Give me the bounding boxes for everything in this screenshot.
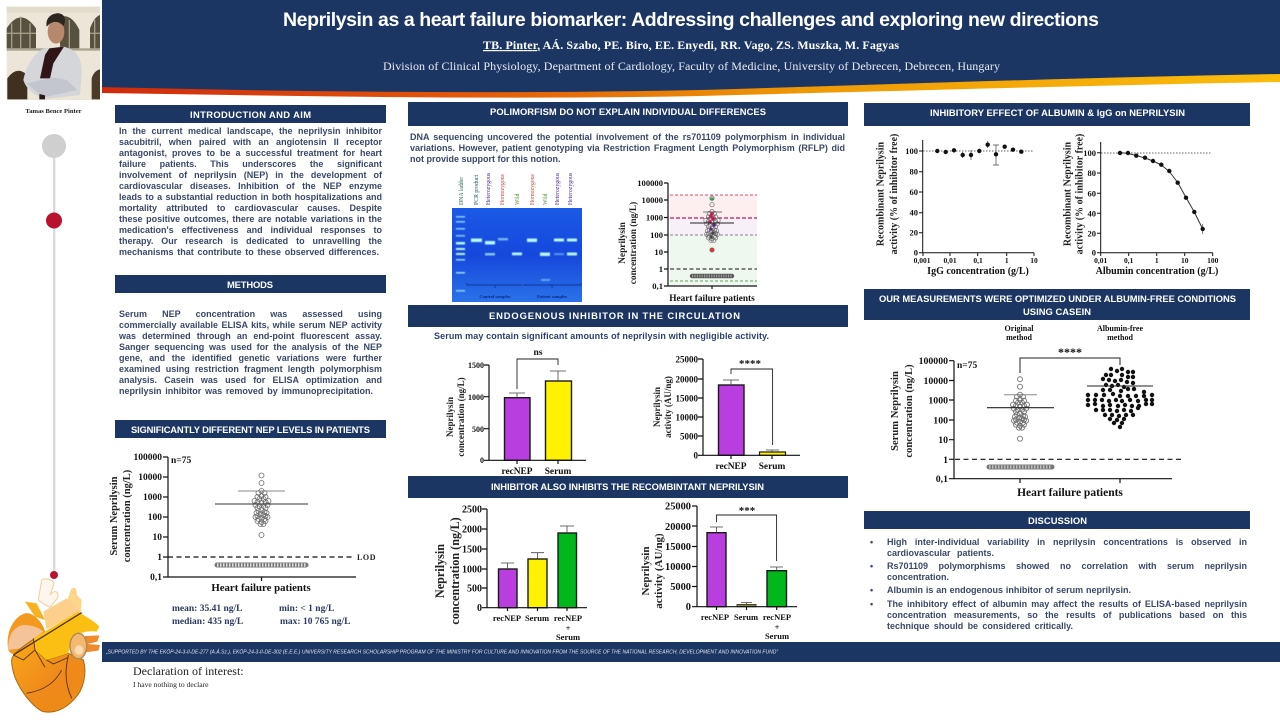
- bar chart: activity recNEP vs serum: 15000: [676, 394, 698, 404]
- declaration of interest: I have nothing to declare: [133, 680, 209, 689]
- chart: serum neprilysin in patients: 100000: [134, 453, 162, 463]
- chart: original versus albumin-free method: concentration (ng/L): [904, 364, 915, 458]
- section header: introduction: [115, 105, 386, 123]
- bar chart: concentration with combination: 0: [477, 603, 482, 614]
- bar chart: concentration with combination: 2000: [462, 524, 482, 536]
- chart: genotype scatter: 10: [654, 247, 663, 257]
- chart: original versus albumin-free method: 1: [943, 455, 948, 466]
- line chart: IgG inhibition: 1: [1005, 256, 1009, 265]
- chart: original versus albumin-free method: 10: [938, 435, 948, 446]
- line chart: albumin inhibition: 100: [1083, 148, 1096, 158]
- chart: original versus albumin-free method: 10000: [924, 376, 948, 387]
- line chart: albumin inhibition: [1062, 134, 1219, 277]
- bullet one: [870, 537, 1247, 558]
- section header: polymorphism: POLIMORFISM DO NOT EXPLAIN INDIVIDUAL DIFFERENCES: [490, 106, 766, 117]
- section header: recombinant inhibition: INHIBITOR ALSO INHIBITS THE RECOMBINTANT NEPRILYSIN: [491, 481, 764, 492]
- chart: serum neprilysin in patients: 0,1: [150, 573, 162, 583]
- text: introduction: cardiovascular diseases. Inhibition of the NEP enzyme: [119, 181, 382, 191]
- presenter photo: [7, 7, 100, 100]
- line chart: IgG inhibition: activity (% of inhibitor free): [889, 134, 900, 254]
- text: introduction: leads to a substantial reduction in both hospitalizations and: [119, 192, 382, 202]
- line chart: albumin inhibition: 40: [1088, 208, 1096, 218]
- section header: albumin and IgG: INHIBITORY EFFECT OF ALBUMIN & IgG on NEPRILYSIN: [930, 107, 1185, 118]
- chart: original versus albumin-free method: 100000: [919, 356, 948, 367]
- bar chart: concentration recNEP vs serum: concentration (ng/L): [456, 377, 466, 457]
- bar chart: concentration recNEP vs serum: Neprilysin: [445, 397, 455, 437]
- bar chart: activity recNEP vs serum: Serum: [759, 462, 785, 472]
- chart: original versus albumin-free method: Serum Neprilysin: [890, 371, 901, 451]
- icon: anatomical heart: [8, 579, 100, 712]
- RFLP gel image: Heterozygous: [486, 172, 492, 205]
- section header: patient levels: [115, 420, 386, 438]
- bar chart: concentration with combination: 500: [467, 584, 482, 594]
- chart: genotype scatter: 1000: [646, 212, 663, 222]
- bar chart: concentration with combination: recNEP: [554, 613, 582, 623]
- section header: endogenous inhibitor: [408, 305, 848, 327]
- bar chart: concentration with combination: 1000: [462, 564, 482, 576]
- section header: casein optimization: USING CASEIN: [1023, 306, 1091, 317]
- chart: serum neprilysin in patients: 10: [152, 533, 162, 543]
- line chart: IgG inhibition: 40: [910, 208, 918, 218]
- line chart: IgG inhibition: IgG concentration (g/L): [927, 266, 1029, 277]
- text: introduction: failure patients. This underscores the significant: [119, 159, 382, 169]
- bar chart: concentration with combination: Serum: [556, 632, 580, 642]
- bar chart: activity with combination: ***: [739, 505, 756, 517]
- funding bar: [102, 642, 1280, 662]
- RFLP gel image: Homozygous: [500, 173, 506, 205]
- bullet four: [870, 599, 1247, 631]
- bar chart: activity with combination: Serum: [765, 631, 789, 641]
- bar chart: activity with combination: Neprilysin: [640, 547, 652, 595]
- text: introduction: antagonist, proves to be a successful treatment for heart: [119, 148, 382, 158]
- text: polymorphism finding: variations. However, patient genotyping via Restriction Fragment Length Polymorphism (RFLP) did: [410, 143, 845, 153]
- section header: methods: [115, 275, 386, 293]
- text: introduction: mechanisms that contribute to these observed differences.: [119, 247, 379, 257]
- chart: serum neprilysin in patients: Serum Neprilysin: [109, 476, 120, 556]
- text: methods: analysis. Casein was used for ELISA optimization and: [119, 375, 382, 385]
- timeline: [42, 134, 66, 579]
- text: introduction: these positive outcomes, there are notable variations in the: [119, 214, 382, 224]
- RFLP gel image: Heterozygous: [555, 172, 561, 205]
- RFLP gel image: Control samples: [479, 294, 511, 299]
- bar chart: concentration with combination: Neprilysin: [433, 544, 447, 598]
- bar chart: concentration with combination: +: [566, 623, 571, 633]
- chart: original versus albumin-free method: 0,1: [936, 474, 948, 485]
- chart: genotype scatter: 1: [659, 264, 663, 274]
- line chart: albumin inhibition: 0,01: [1094, 256, 1108, 265]
- RFLP gel image: DNA ladder: [459, 177, 465, 205]
- line chart: albumin inhibition: 60: [1088, 188, 1096, 198]
- section header: endogenous inhibitor: ENDOGENOUS INHIBITOR IN THE CIRCULATION: [489, 310, 740, 321]
- funding bar: „SUPPORTED BY THE EKÖP-24-3-II-DE-277 (A.Á.Sz.), EKÖP-24-3-II-DE-302 (E.E.E.) UNIVERSITY RESEARCH SCHOLARSHIP PROGRAM OF THE MINISTRY FOR CULTURE AND INNOVATION FROM THE SOURCE OF THE NATIONAL RESEARCH, DEVELOPMENT AND INNOVATION FUND”: [105, 648, 778, 656]
- bullet four: concentration measurements, so the results of publications based on this: [887, 610, 1247, 620]
- chart: genotype scatter: concentration (ng/L): [628, 202, 639, 284]
- bar chart: activity with combination: recNEP: [763, 612, 791, 622]
- line chart: IgG inhibition: 20: [910, 228, 918, 238]
- bar chart: concentration recNEP vs serum: 1000: [468, 393, 484, 402]
- bar chart: activity recNEP vs serum: ****: [739, 358, 762, 370]
- text: introduction: In the current medical landscape, the neprilysin inhibitor: [119, 126, 382, 136]
- section header: polymorphism: [408, 102, 848, 126]
- bar chart: activity with combination: 0: [686, 602, 691, 613]
- statistics: patient summary: max: 10 765 ng/L: [280, 617, 350, 627]
- bullet three: Albumin is an endogenous inhibitor of serum neprilysin.: [887, 585, 1131, 595]
- statistics: patient summary: [172, 604, 350, 627]
- line chart: albumin inhibition: activity (% of inhibitor free): [1074, 134, 1086, 254]
- bar chart: concentration recNEP vs serum: 0: [480, 456, 484, 465]
- line chart: IgG inhibition: 60: [910, 187, 918, 197]
- chart: genotype scatter: Heart failure patients: [669, 294, 755, 304]
- text: methods: examined using restriction fragment length polymorphism: [119, 364, 382, 374]
- bar chart: concentration recNEP vs serum: ns: [534, 348, 543, 358]
- text: introduction: involvement of neprilysin (NEP) in the development of: [119, 170, 382, 180]
- chart: original versus albumin-free method: [890, 324, 1184, 499]
- bar chart: activity with combination: 5000: [670, 582, 691, 593]
- bar chart: activity recNEP vs serum: [652, 354, 800, 472]
- chart: original versus albumin-free method: Heart failure patients: [1017, 487, 1123, 499]
- line chart: IgG inhibition: 0,1: [973, 256, 983, 265]
- chart: genotype scatter: [618, 178, 757, 304]
- line chart: albumin inhibition: 10: [1181, 256, 1189, 265]
- bullet one: High inter-individual variability in neprilysin concentrations is observed in: [887, 537, 1247, 547]
- bar chart: concentration with combination: 1500: [462, 544, 482, 556]
- section header: introduction: INTRODUCTION AND AIM: [190, 109, 311, 120]
- RFLP gel image: [452, 172, 582, 302]
- bullet two: concentration.: [887, 572, 949, 582]
- bar chart: activity recNEP vs serum: 25000: [676, 354, 698, 364]
- bar chart: activity with combination: activity (AU/ng): [653, 533, 665, 609]
- bar chart: activity with combination: +: [775, 622, 780, 632]
- line chart: IgG inhibition: 80: [910, 167, 918, 177]
- chart: serum neprilysin in patients: 100: [148, 513, 162, 523]
- RFLP gel image: Wild: [543, 194, 549, 205]
- chart: original versus albumin-free method: 1000: [928, 396, 948, 406]
- bar chart: activity recNEP vs serum: Neprilysin: [652, 387, 662, 427]
- text: methods: [119, 309, 382, 396]
- chart: genotype scatter: 100: [650, 230, 663, 240]
- text: methods: Serum NEP concentration was assessed using: [119, 309, 382, 319]
- text: polymorphism finding: DNA sequencing uncovered the potential involvement of the rs701109 polymorphism in individual: [410, 132, 845, 142]
- list: discussion points: [870, 537, 1247, 631]
- bullet four: technique should be considered critically.: [887, 621, 1073, 631]
- RFLP gel image: Heterozygous: [568, 172, 574, 205]
- declaration of interest: Declaration of interest:: [133, 664, 244, 678]
- affiliation: Division of Clinical Physiology, Department of Cardiology, Faculty of Medicine, University of Debrecen, Debrecen, Hungary: [383, 59, 1000, 73]
- chart: serum neprilysin in patients: concentration (ng/L): [122, 469, 133, 562]
- RFLP gel image: Homozygous: [530, 173, 536, 205]
- bar chart: activity with combination: [640, 502, 797, 641]
- line chart: albumin inhibition: 0,1: [1124, 256, 1134, 265]
- bullet two: [870, 561, 1247, 582]
- title: Neprilysin as a heart failure biomarker: Addressing challenges and exploring new directions: [283, 9, 1099, 31]
- chart: original versus albumin-free method: method: [1006, 333, 1032, 342]
- bar chart: concentration recNEP vs serum: recNEP: [501, 467, 533, 477]
- chart: original versus albumin-free method: 100: [933, 416, 948, 426]
- line chart: IgG inhibition: 0: [914, 248, 918, 258]
- bar chart: activity recNEP vs serum: 0: [694, 450, 698, 460]
- RFLP gel image: PCR product: [474, 174, 480, 205]
- line chart: albumin inhibition: 100: [1207, 256, 1219, 265]
- line chart: IgG inhibition: 100: [905, 146, 918, 156]
- line chart: IgG inhibition: 0,001: [914, 256, 931, 265]
- line chart: IgG inhibition: 10: [1030, 256, 1038, 265]
- bullet one: •: [870, 537, 873, 547]
- chart: genotype scatter: 100000: [637, 178, 663, 188]
- text: methods: gene, and the identified genetic variations were further: [119, 353, 382, 363]
- chart: genotype scatter: 0,1: [652, 281, 663, 291]
- bar chart: concentration with combination: concentration (ng/L): [448, 517, 462, 625]
- section header: casein optimization: [864, 289, 1250, 320]
- chart: original versus albumin-free method: Albumin-free: [1097, 324, 1143, 333]
- chart: original versus albumin-free method: ****: [1058, 345, 1082, 359]
- bar chart: activity recNEP vs serum: 10000: [676, 412, 698, 422]
- bullet four: The inhibitory effect of albumin may affect the results of ELISA-based neprilysin: [887, 599, 1247, 609]
- authors: TB. Pinter, AÁ. Szabo, PE. Biro, EE. Enyedi, RR. Vago, ZS. Muszka, M. Fagyas: [483, 38, 899, 52]
- RFLP gel image: Patient samples: [537, 294, 567, 299]
- bullet one: cardiovascular patients.: [887, 548, 994, 558]
- text: methods: commercially available ELISA kits, while serum NEP activity: [119, 320, 382, 330]
- bar chart: concentration recNEP vs serum: 500: [472, 425, 484, 434]
- statistics: patient summary: min: < 1 ng/L: [279, 604, 334, 614]
- text: methods: was determined through an end-point fluorescent assay.: [119, 331, 382, 341]
- chart: genotype scatter: 10000: [642, 195, 663, 205]
- chart: serum neprilysin in patients: n=75: [171, 456, 191, 466]
- text: introduction: medication's effectiveness and individual responses to: [119, 225, 382, 235]
- chart: serum neprilysin in patients: 1000: [143, 493, 162, 503]
- chart: original versus albumin-free method: Original: [1005, 324, 1034, 333]
- presenter name: Tamas Bence Pinter: [25, 108, 82, 115]
- line chart: albumin inhibition: 0: [1092, 248, 1096, 258]
- section header: casein optimization: OUR MEASUREMENTS WERE OPTIMIZED UNDER ALBUMIN-FREE CONDITIONS: [879, 293, 1236, 304]
- statistics: patient summary: mean: 35.41 ng/L: [172, 604, 242, 614]
- line chart: albumin inhibition: 80: [1088, 168, 1096, 178]
- bar chart: activity with combination: 15000: [665, 542, 691, 553]
- text: introduction: [119, 126, 382, 257]
- chart: serum neprilysin in patients: 10000: [138, 473, 162, 483]
- bar chart: activity recNEP vs serum: 20000: [676, 374, 698, 384]
- chart: original versus albumin-free method: method: [1107, 333, 1133, 342]
- text: introduction: mortality attributed to cardiovascular causes. Despite: [119, 203, 382, 213]
- bar chart: activity with combination: recNEP: [701, 612, 729, 622]
- bar chart: activity recNEP vs serum: recNEP: [715, 462, 747, 472]
- line chart: albumin inhibition: 1: [1155, 256, 1159, 265]
- chart: serum neprilysin in patients: 1: [157, 553, 162, 563]
- bar chart: activity with combination: 25000: [665, 502, 691, 512]
- text: polymorphism finding: not provide support for this notion.: [410, 154, 560, 164]
- text: methods: neprilysin inhibitor was removed by immunoprecipitation.: [119, 386, 373, 396]
- line chart: IgG inhibition: [876, 134, 1038, 277]
- bar chart: activity with combination: 20000: [665, 522, 691, 533]
- text: activity note: Serum may contain significant amounts of neprilysin with negligible activity.: [434, 331, 769, 341]
- bar chart: concentration recNEP vs serum: 1500: [468, 361, 484, 370]
- line chart: IgG inhibition: 0,01: [943, 256, 957, 265]
- header banner: [102, 0, 1280, 98]
- chart: serum neprilysin in patients: [109, 453, 376, 594]
- bullet two: Rs701109 polymorphisms showed no correlation with serum neprilysin: [887, 561, 1247, 571]
- section header: patient levels: SIGNIFICANTLY DIFFERENT NEP LEVELS IN PATIENTS: [131, 424, 370, 435]
- text: polymorphism finding: [410, 132, 845, 164]
- black dot swarm: [1086, 367, 1154, 429]
- bar chart: concentration recNEP vs serum: Serum: [545, 467, 571, 477]
- text: methods: Sanger sequencing was used for the analysis of the NEP: [119, 342, 382, 352]
- section header: discussion: [864, 511, 1250, 529]
- chart: original versus albumin-free method: n=75: [957, 361, 977, 371]
- bar chart: concentration with combination: recNEP: [493, 613, 521, 623]
- section header: methods: METHODS: [227, 279, 273, 290]
- statistics: patient summary: median: 435 ng/L: [172, 617, 243, 627]
- line chart: IgG inhibition: Recombinant Neprilysin: [876, 141, 886, 246]
- section header: recombinant inhibition: [408, 476, 848, 498]
- chart: serum neprilysin in patients: Heart failure patients: [211, 582, 311, 594]
- bar chart: activity recNEP vs serum: 5000: [680, 432, 698, 442]
- bar chart: concentration recNEP vs serum: [445, 348, 586, 477]
- bullet two: •: [870, 561, 873, 571]
- text: introduction: sacubitril, when paired with an angiotensin II receptor: [119, 137, 382, 147]
- bar chart: concentration with combination: [433, 504, 587, 642]
- text: introduction: therapy. Our research is dedicated to unravelling the: [119, 236, 382, 246]
- section header: discussion: DISCUSSION: [1028, 515, 1087, 526]
- line chart: albumin inhibition: Recombinant Neprilysin: [1062, 141, 1074, 246]
- line chart: albumin inhibition: 20: [1088, 228, 1096, 238]
- bar chart: concentration with combination: Serum: [525, 613, 549, 623]
- RFLP gel image: Wild: [515, 194, 521, 205]
- bullet four: •: [870, 599, 873, 609]
- bar chart: activity with combination: Serum: [734, 612, 758, 622]
- chart: genotype scatter: Neprilysin: [618, 221, 628, 264]
- bar chart: activity recNEP vs serum: activity (AU/ng): [663, 376, 673, 438]
- line chart: albumin inhibition: Albumin concentration (g/L): [1096, 266, 1218, 277]
- bullet three: •: [870, 585, 873, 595]
- bar chart: concentration with combination: 2500: [462, 504, 482, 516]
- chart: serum neprilysin in patients: LOD: [357, 553, 376, 562]
- bar chart: activity with combination: 10000: [665, 562, 691, 573]
- section header: albumin and IgG: [864, 103, 1250, 126]
- declaration of interest: [133, 664, 244, 689]
